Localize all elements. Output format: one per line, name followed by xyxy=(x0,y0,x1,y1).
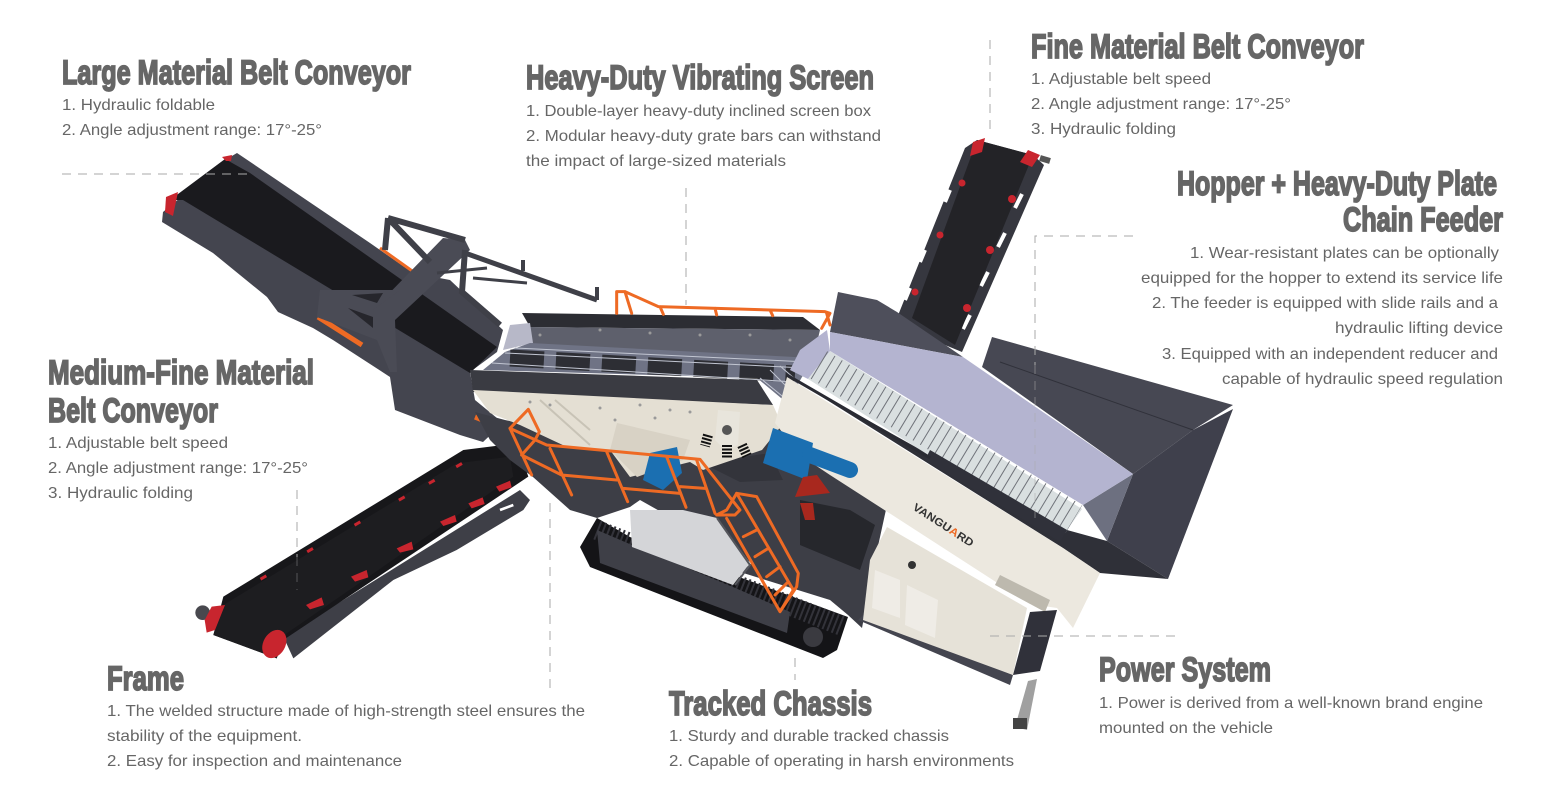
text block: hopper and plate chain feeder: 2. The feeder is equipped with slide rails and a xyxy=(1152,295,1498,312)
text block: fine material belt conveyor: 3. Hydraulic folding xyxy=(1031,121,1176,138)
text block: medium-fine material belt conveyor: 1. Adjustable belt speed xyxy=(48,435,228,452)
text block: hopper and plate chain feeder: 1. Wear-resistant plates can be optionally xyxy=(1190,245,1499,262)
logo on feeder beam: VANGUARD xyxy=(910,501,976,550)
text block: medium-fine material belt conveyor: Medium-Fine Material xyxy=(48,354,314,392)
text block: heavy-duty vibrating screen: 1. Double-layer heavy-duty inclined screen box xyxy=(526,103,871,120)
hopper xyxy=(787,292,1233,579)
text block: power system: Power System xyxy=(1099,651,1271,689)
text block: fine material belt conveyor xyxy=(1031,28,1364,138)
text block: frame xyxy=(107,660,585,770)
text block: hopper and plate chain feeder: equipped for the hopper to extend its service life xyxy=(1141,270,1503,287)
text block: hopper and plate chain feeder: 3. Equipped with an independent reducer and xyxy=(1162,346,1498,363)
chassis structure xyxy=(475,412,887,628)
text block: frame: stability of the equipment. xyxy=(107,728,302,745)
vibrating screen xyxy=(470,313,820,477)
medium-fine material belt conveyor xyxy=(195,443,530,662)
text block: fine material belt conveyor: Fine Material Belt Conveyor xyxy=(1031,28,1364,66)
text block: heavy-duty vibrating screen: 2. Modular heavy-duty grate bars can withstand xyxy=(526,128,881,145)
text block: tracked chassis: 2. Capable of operating in harsh environments xyxy=(669,753,1014,770)
leader lines xyxy=(62,40,1182,692)
spring mount xyxy=(705,410,747,458)
text block: heavy-duty vibrating screen: the impact of large-sized materials xyxy=(526,153,786,170)
feed conveyor side beam xyxy=(775,375,1100,730)
large material belt conveyor xyxy=(162,153,503,442)
support frame over conveyor xyxy=(317,218,597,372)
text block: hopper and plate chain feeder: hydraulic lifting device xyxy=(1335,320,1503,337)
engine housing xyxy=(858,527,1027,685)
fine material belt conveyor xyxy=(897,138,1050,352)
text block: power system: 1. Power is derived from a well-known brand engine xyxy=(1099,695,1483,712)
text block: heavy-duty vibrating screen: Heavy-Duty Vibrating Screen xyxy=(526,59,874,97)
text block: hopper and plate chain feeder xyxy=(1141,165,1503,388)
blue drive motors xyxy=(643,428,850,520)
text block: large material belt conveyor: Large Material Belt Conveyor xyxy=(62,54,411,92)
text block: fine material belt conveyor: 1. Adjustable belt speed xyxy=(1031,71,1211,88)
text block: medium-fine material belt conveyor: Belt Conveyor xyxy=(48,392,218,430)
text block: tracked chassis xyxy=(669,685,1014,770)
text block: large material belt conveyor xyxy=(62,54,411,139)
orange railings and ladder xyxy=(510,292,830,612)
text block: power system xyxy=(1099,651,1483,737)
text block: frame: 2. Easy for inspection and maintenance xyxy=(107,753,402,770)
text block: large material belt conveyor: 2. Angle adjustment range: 17°-25° xyxy=(62,122,322,139)
text block: medium-fine material belt conveyor xyxy=(48,354,314,502)
text block: medium-fine material belt conveyor: 3. Hydraulic folding xyxy=(48,485,193,502)
text block: fine material belt conveyor: 2. Angle adjustment range: 17°-25° xyxy=(1031,96,1291,113)
text block: frame: 1. The welded structure made of high-strength steel ensures the xyxy=(107,703,585,720)
crawler track xyxy=(580,518,848,658)
power box cover xyxy=(630,510,750,585)
text block: tracked chassis: Tracked Chassis xyxy=(669,685,872,723)
text block: medium-fine material belt conveyor: 2. Angle adjustment range: 17°-25° xyxy=(48,460,308,477)
text block: frame: Frame xyxy=(107,660,184,698)
text block: tracked chassis: 1. Sturdy and durable tracked chassis xyxy=(669,728,949,745)
machine illustration xyxy=(162,138,1233,730)
text block: heavy-duty vibrating screen xyxy=(526,59,881,170)
text block: hopper and plate chain feeder: capable of hydraulic speed regulation xyxy=(1222,371,1503,388)
text block: large material belt conveyor: 1. Hydraulic foldable xyxy=(62,97,215,114)
text block: power system: mounted on the vehicle xyxy=(1099,720,1273,737)
